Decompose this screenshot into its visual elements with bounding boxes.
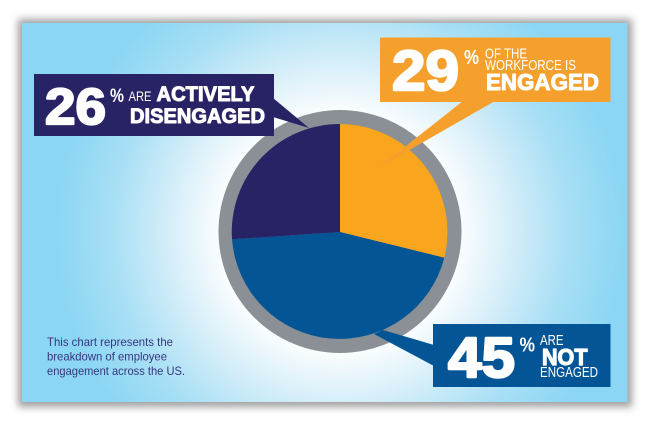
footnote text — [47, 336, 185, 378]
callout box — [34, 74, 274, 136]
value: 26 — [45, 78, 106, 135]
footnote text: engagement across the US. — [47, 365, 185, 378]
slice: not engaged 45% — [232, 232, 444, 339]
engaged: ENGAGED — [486, 69, 599, 95]
of the: OF THE — [485, 46, 527, 62]
callout box — [433, 324, 610, 387]
disengaged: DISENGAGED — [130, 105, 265, 128]
slice: engaged 29% — [340, 124, 447, 258]
percent sign: % — [464, 47, 479, 69]
actively: ACTIVELY — [156, 83, 254, 106]
workforce is: WORKFORCE IS — [485, 58, 576, 74]
percent sign: % — [520, 334, 535, 356]
callout: 45% not engaged — [374, 324, 610, 390]
slice: actively disengaged 26% — [232, 124, 340, 239]
value: 45 — [448, 326, 515, 390]
are: ARE — [128, 88, 152, 104]
value: 29 — [392, 39, 459, 103]
chart ring — [218, 110, 462, 353]
not: NOT — [542, 344, 588, 370]
callout box — [380, 38, 610, 102]
are: ARE — [540, 333, 564, 349]
callout pointer — [273, 98, 309, 128]
callout: 29% engaged — [378, 38, 610, 168]
engaged: ENGAGED — [540, 365, 598, 381]
footnote text: breakdown of employee — [47, 350, 167, 364]
pie chart — [218, 110, 462, 353]
footnote text: This chart represents the — [47, 336, 173, 349]
callout pointer — [378, 101, 495, 168]
callout pointer — [374, 330, 434, 366]
percent sign: % — [110, 86, 124, 107]
callout: 26% actively disengaged — [34, 74, 309, 136]
